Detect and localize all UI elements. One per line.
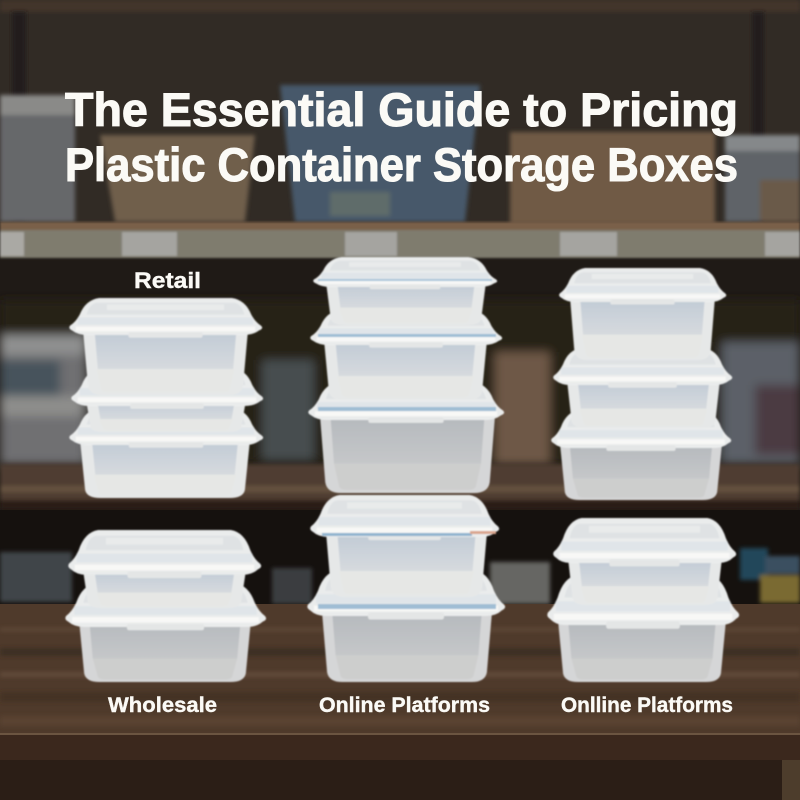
- container: column 2 fourth: [310, 495, 499, 597]
- column 1: wholesale stack: [65, 530, 266, 682]
- label: retail: Retail: [134, 268, 201, 293]
- label: onlline platforms: Onlline Platforms: [561, 694, 733, 717]
- container: column 3 fourth: [553, 518, 736, 605]
- label: wholesale: Wholesale: [108, 694, 217, 717]
- title: Plastic Container Storage Boxes: [65, 138, 738, 191]
- container: column 3 third: [551, 410, 731, 500]
- container: column 2 fifth: [307, 570, 505, 682]
- label: online platforms: Online Platforms: [319, 694, 490, 717]
- container: column 2 top: [313, 257, 497, 325]
- container: column 2 third: [308, 382, 504, 493]
- container: wholesale top: [68, 530, 261, 608]
- container: column 2 second: [310, 310, 502, 400]
- container: column 3 second: [553, 348, 732, 428]
- container: column 3 fifth: [547, 575, 739, 682]
- column 1: retail stack: [69, 298, 263, 498]
- column 3 stack: [547, 268, 739, 682]
- title: The Essential Guide to Pricing: [65, 83, 738, 136]
- container: retail top: [69, 298, 262, 395]
- container: retail middle: [71, 368, 263, 432]
- container: column 3 top: [559, 268, 726, 360]
- container: retail bottom: [69, 408, 263, 498]
- title: [65, 83, 738, 191]
- column 2 stack: [307, 257, 505, 682]
- container: wholesale bottom: [65, 583, 266, 682]
